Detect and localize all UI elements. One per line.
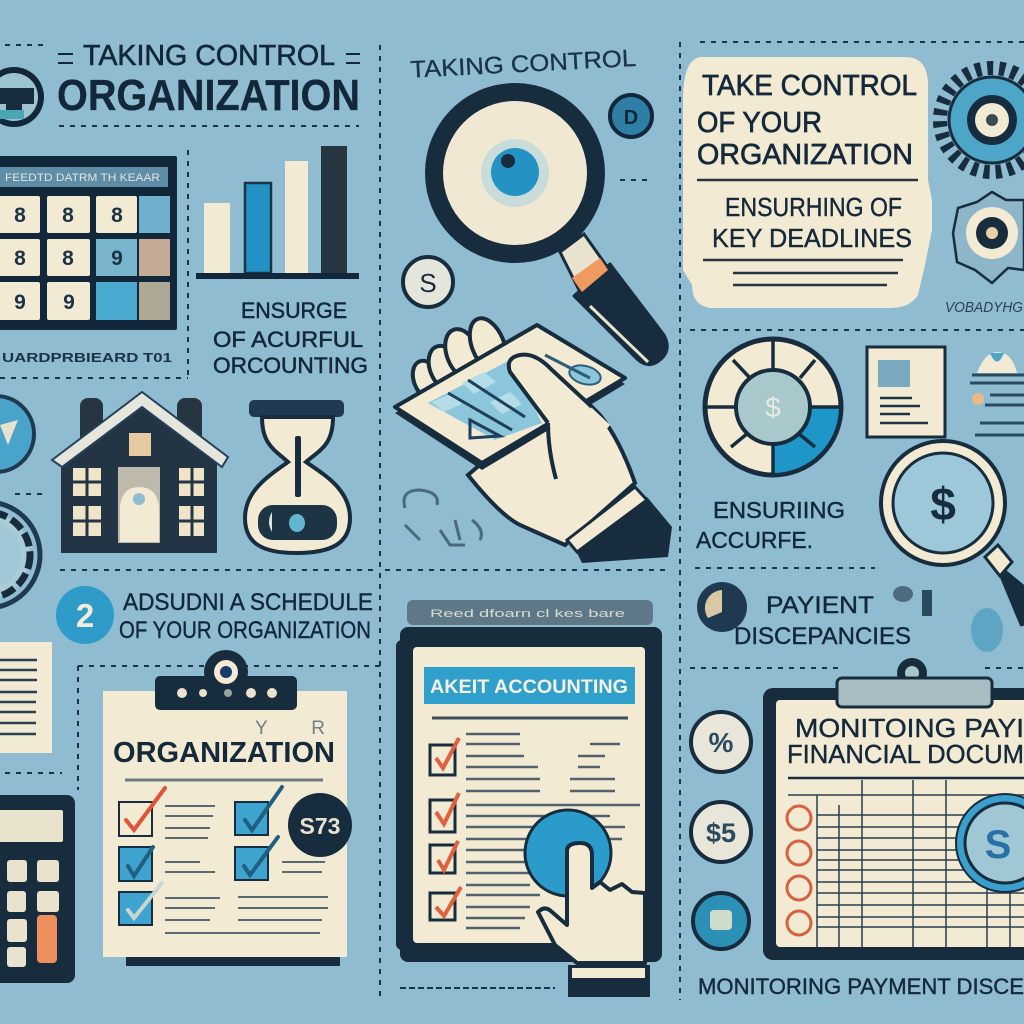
heading (697, 70, 917, 171)
icon: dollar coin: S (419, 268, 437, 298)
text: ensure accurate accounting (213, 298, 368, 378)
heading: schedule (119, 589, 373, 644)
icon: dollar coin (403, 257, 453, 307)
heading: taking control center: TAKING CONTROL (410, 45, 637, 84)
icon: blue coin: D (624, 107, 638, 129)
icon: magnifier dollar (881, 441, 1024, 625)
heading: OF YOUR (697, 107, 822, 139)
heading: TAKE CONTROL (702, 70, 917, 102)
heading: taking control organization (57, 40, 360, 120)
icon: dollar badge: $5 (706, 818, 736, 848)
heading: taking control organization: TAKING CONTROL (83, 40, 335, 72)
checklist (119, 787, 328, 933)
banner: AKEIT ACCOUNTING (430, 677, 628, 698)
clip (837, 658, 992, 707)
icon: blue coin (610, 95, 652, 137)
dashes under tablet (400, 987, 555, 989)
icon: percent badge (691, 712, 751, 772)
panel: organization checklist (103, 650, 352, 966)
heading: schedule: OF YOUR ORGANIZATION (119, 617, 371, 644)
icon: document (867, 347, 945, 437)
table (788, 780, 1024, 947)
checklist (430, 734, 640, 928)
bar chart (196, 146, 359, 279)
text: label strip: Reed dfoarn cl kes bare (430, 608, 625, 620)
icon: mini chart document (970, 352, 1024, 435)
icon: hourglass (245, 400, 350, 553)
text: monitoring payment discrepancies: MONITORING PAYMENT DISCE (698, 974, 1024, 999)
caption: keyboard label: UARDPRBIEARD T01 (2, 350, 172, 365)
icon: left top badge (0, 67, 44, 127)
subheading: ENSURHING OF (725, 192, 902, 222)
subheading: KEY DEADLINES (712, 223, 912, 253)
heading: schedule: ADSUDNI A SCHEDULE (123, 589, 373, 616)
text: payment discrepancies (734, 592, 911, 650)
clipboard clip (155, 650, 297, 710)
text: payment discrepancies: PAYIENT (766, 592, 874, 619)
text: your: Y R (255, 718, 325, 739)
text: ensuring accurate: ACCURFE. (696, 527, 813, 553)
icon: magnifier dollar: $ (930, 478, 956, 530)
icon: gear lower right (953, 192, 1024, 283)
text: ensure accurate accounting: ENSURGE (241, 298, 347, 323)
icon: house (52, 392, 228, 553)
badge: S73 (288, 793, 352, 857)
panel: take control note (683, 57, 932, 308)
heading: taking control organization: ORGANIZATION (57, 71, 360, 120)
icon: calculator keypad: 8 (62, 247, 74, 270)
panel: financial document table (763, 658, 1024, 960)
icon: clock left (0, 502, 40, 608)
text: ensure accurate accounting: ORCOUNTING (213, 353, 368, 378)
icon: calculator keypad: 8 (62, 204, 74, 227)
icon: dollar coin: S (985, 823, 1011, 867)
icon: compass left (0, 396, 34, 472)
text: label strip (407, 600, 653, 625)
text: payment discrepancies: DISCEPANCIES (734, 623, 911, 650)
icon: donut chart: $ (765, 392, 781, 423)
icon: pie marker (697, 582, 747, 632)
heading: MONITOING PAYI (795, 713, 1024, 743)
heading: organization: ORGANIZATION (113, 737, 335, 769)
icon: gear top right (940, 68, 1024, 172)
badge: S73: S73 (300, 813, 340, 839)
icon: dollar coin (956, 794, 1024, 892)
icon: percent badge: % (709, 727, 734, 758)
icon: calculator bottom left (0, 795, 75, 983)
icon: calculator keypad: 8 (111, 204, 123, 227)
heading: ORGANIZATION (697, 139, 913, 171)
text: ensuring accurate: ENSURIING (713, 497, 845, 523)
icon: small blobs (893, 586, 1003, 652)
text: ensure accurate accounting: OF ACURFUL (213, 327, 363, 352)
icon: dollar badge (691, 802, 751, 862)
icon: calculator keypad: FEEDTD DATRM TH KEAAR (5, 172, 160, 184)
icon: donut chart (705, 339, 841, 475)
heading: FINANCIAL DOCUM (787, 739, 1024, 769)
icon: calculator keypad: 9 (63, 291, 75, 314)
heading (787, 713, 1024, 769)
banner (424, 667, 635, 704)
icon: calculator keypad: 8 (14, 204, 26, 227)
subheading (712, 192, 912, 253)
icon: calculator keypad: 8 (14, 247, 26, 270)
icon: pointing hand button (525, 810, 650, 997)
icon: magnifying glass (425, 83, 667, 365)
badge: number 2: 2 (76, 597, 94, 634)
icon: hand holding calculator (395, 313, 672, 563)
text: ensuring accurate (696, 497, 845, 553)
badge: number 2 (56, 586, 114, 644)
panel: tablet accounting (396, 627, 662, 997)
icon: small sketch (404, 490, 481, 545)
icon: calculator keypad: 9 (14, 291, 26, 314)
icon: calculator keypad: 9 (111, 247, 123, 270)
icon: teal badge (693, 893, 749, 949)
icon: document left (0, 642, 52, 753)
icon: calculator keypad (0, 156, 177, 330)
